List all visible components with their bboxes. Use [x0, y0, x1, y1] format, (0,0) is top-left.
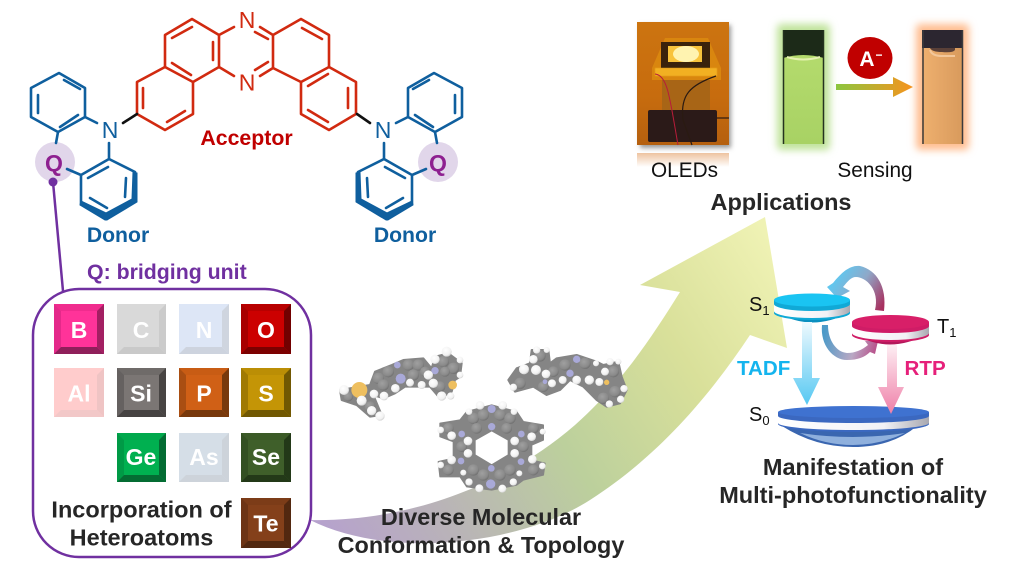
tile: C: C: [133, 317, 149, 343]
left donor bonds: [31, 73, 135, 208]
molecular caption: Diverse Molecular: [381, 504, 581, 530]
left donor N and Q: N: [102, 117, 118, 143]
cycle arrow: upward: [827, 266, 885, 311]
anion badge: A: [859, 48, 875, 71]
label S0: 0: [762, 413, 770, 428]
tile: S: [241, 368, 291, 417]
photo background: [637, 22, 729, 145]
tile: Si: Si: [130, 380, 152, 406]
left Q highlight circle: [35, 142, 75, 182]
tile: Al: Al: [68, 380, 90, 406]
label S1: 1: [762, 303, 770, 318]
model: bent conformer: [339, 347, 463, 421]
multi-photofunctionality caption: [719, 454, 987, 508]
molecular caption: Conformation & Topology: [338, 532, 624, 558]
left donor label: Donor: [87, 224, 149, 247]
left donor N and Q: [45, 117, 118, 176]
cuvette: green: [777, 24, 830, 150]
photo shadow: [640, 25, 731, 148]
connector from Q to panel: [48, 178, 63, 291]
right donor bonds: [356, 73, 462, 220]
TADF label: TADF: [737, 357, 790, 380]
acceptor label: Acceptor: [200, 126, 293, 150]
RTP label: RTP: [904, 357, 946, 380]
right donor: [356, 73, 462, 220]
OLEDs label: OLEDs: [651, 159, 718, 182]
sensing arrow: [836, 77, 913, 97]
tile: O: O: [257, 317, 275, 343]
tile: O: [241, 304, 291, 354]
right Q highlight circle: [418, 142, 458, 182]
tile: B: B: [71, 317, 87, 343]
bridging unit label: Q: bridging unit: [87, 260, 247, 284]
level: T1: [852, 315, 929, 344]
tile: B: [54, 304, 104, 354]
tile: N: N: [196, 317, 212, 343]
panel border: [33, 289, 311, 557]
TADF arrow: [793, 322, 820, 405]
right donor N and Q: N: [375, 117, 391, 143]
left donor: [31, 73, 137, 220]
multi-photofunctionality caption: Manifestation of: [763, 454, 943, 480]
level: S0: [778, 406, 929, 447]
level: S1: [774, 294, 850, 322]
cuvette: orange: [916, 24, 969, 150]
tile: Te: Te: [253, 510, 279, 536]
tile: P: P: [196, 380, 212, 406]
label S0: S: [749, 404, 762, 426]
molecular models: [339, 346, 628, 493]
acceptor nitrogen labels: [239, 7, 255, 96]
energy level diagram: [737, 266, 956, 447]
model: cyclic conformer: [437, 401, 546, 493]
photo reflection: [637, 153, 729, 167]
label S1: S: [749, 294, 762, 316]
label T1: T: [937, 316, 949, 338]
right linker bond: [357, 114, 370, 123]
tile: Si: [117, 368, 166, 417]
tile: As: As: [189, 444, 219, 470]
multi-photofunctionality caption: Multi-photofunctionality: [719, 482, 987, 508]
acceptor structure: [137, 19, 356, 130]
tile: Al: [54, 368, 104, 417]
label T1: 1: [949, 325, 956, 340]
left donor wedge bonds: [80, 172, 137, 220]
right donor label: Donor: [374, 224, 436, 247]
tile: Se: [241, 433, 291, 482]
right donor N and Q: [375, 117, 447, 176]
tile: Se: Se: [252, 444, 280, 470]
cycle arrow: downward: [822, 325, 878, 360]
tile: C: [117, 304, 166, 354]
tile: Ge: Ge: [126, 444, 156, 470]
molecular caption: [338, 504, 624, 558]
panel caption: [51, 496, 232, 550]
tile: Te: [241, 498, 291, 548]
RTP arrow: [878, 345, 904, 414]
tile: As: [179, 433, 229, 482]
tile: N: [179, 304, 229, 354]
panel: heteroatoms: [33, 289, 311, 557]
anion badge: −: [875, 48, 883, 62]
sensing label: Sensing: [837, 159, 913, 182]
big curved gradient arrow: [310, 217, 787, 543]
panel caption: Heteroatoms: [70, 524, 213, 550]
left donor N and Q: Q: [45, 150, 63, 176]
tile: S: S: [258, 380, 274, 406]
panel caption: Incorporation of: [51, 496, 232, 522]
anion badge: [848, 37, 892, 79]
acceptor nitrogen labels: N: [239, 70, 255, 96]
tile: Ge: [117, 433, 166, 482]
acceptor nitrogen labels: N: [239, 7, 255, 33]
tile: P: [179, 368, 229, 417]
OLED photo: [637, 22, 731, 167]
applications heading: Applications: [710, 189, 852, 215]
model: twisted conformer: [508, 346, 628, 408]
right donor N and Q: Q: [429, 150, 447, 176]
left linker bond: [123, 114, 137, 123]
